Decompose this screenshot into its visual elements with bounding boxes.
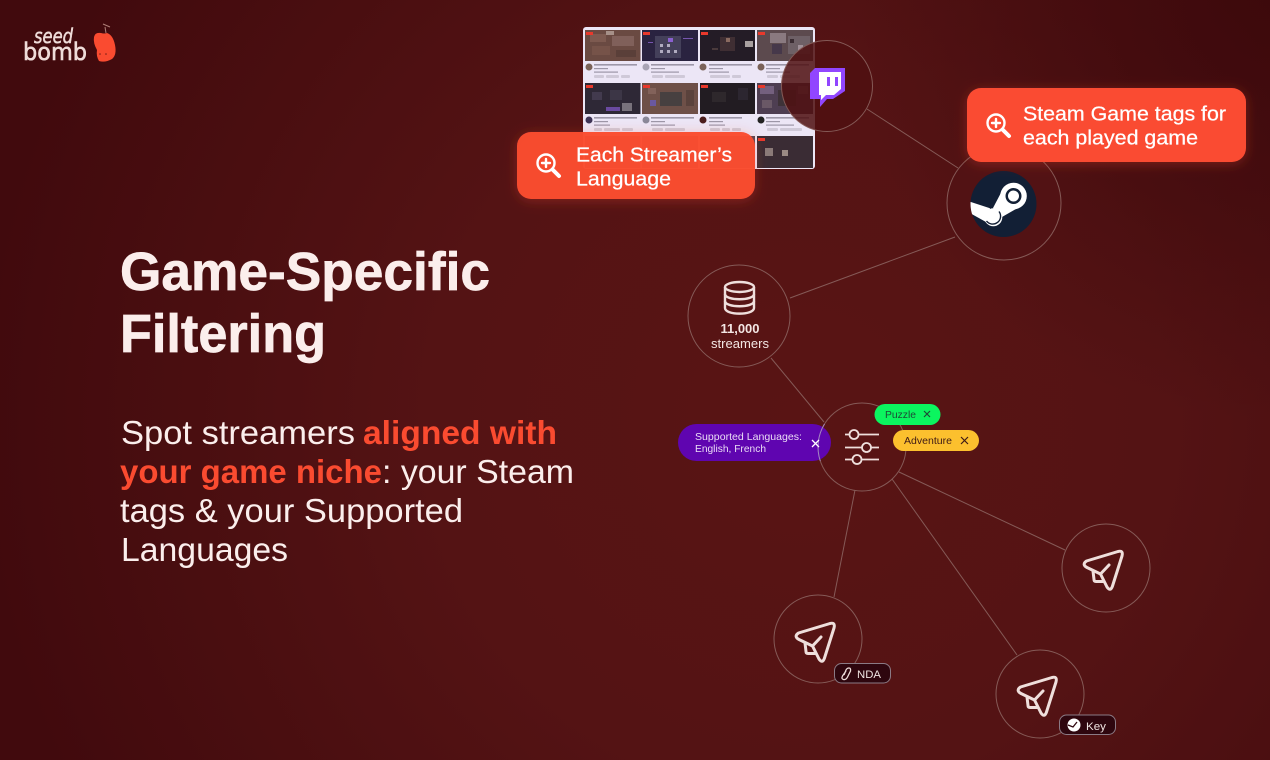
title: Game-Specific xyxy=(120,242,490,302)
callout: steam game tags xyxy=(967,88,1246,162)
tag: supported languages xyxy=(678,424,831,461)
body text: aligned with xyxy=(363,414,557,451)
tag: supported languages: English, French xyxy=(695,443,766,455)
callout: each streamer's language: Each Streamer’s xyxy=(576,144,732,166)
node: database 11,000 streamers: streamers xyxy=(711,336,769,351)
screenshot: streamer grid xyxy=(583,27,815,169)
live badges xyxy=(586,32,765,141)
tag: puzzle: Puzzle xyxy=(885,409,916,421)
node: send key xyxy=(996,650,1116,738)
node: filter xyxy=(818,403,906,491)
node: twitch xyxy=(782,40,872,132)
tag chips xyxy=(594,75,802,131)
logo: seed bomb: seed xyxy=(34,24,73,48)
callout: steam game tags: each played game xyxy=(1023,126,1198,150)
title xyxy=(120,242,490,364)
callout: each streamer's language: Language xyxy=(576,168,671,190)
icon: steam xyxy=(968,171,1036,237)
row 1 thumbnails xyxy=(585,30,813,61)
tag: adventure xyxy=(893,430,979,451)
node: send right xyxy=(1062,524,1150,612)
body text: tags & your Supported xyxy=(120,492,463,529)
avatars xyxy=(586,64,764,124)
icon: magnifier xyxy=(538,154,559,176)
metadata lines xyxy=(594,64,809,126)
tag: puzzle xyxy=(874,404,940,425)
logo: seed bomb xyxy=(23,24,116,66)
body text: Languages xyxy=(121,531,288,568)
body text: your game niche xyxy=(120,453,382,490)
tag: adventure: Adventure xyxy=(904,435,952,447)
badge: key: Key xyxy=(1086,721,1107,733)
body text: Spot streamers xyxy=(121,414,355,451)
node: database 11,000 streamers: 11,000 xyxy=(720,321,760,336)
icon: paper plane xyxy=(1018,677,1056,715)
node: database 11,000 streamers xyxy=(688,265,790,367)
icon: paper plane xyxy=(796,623,834,661)
row 3 thumbnails xyxy=(585,136,813,168)
row 2 thumbnails xyxy=(585,83,813,114)
tag: supported languages: Supported Languages: xyxy=(695,431,802,443)
icon: database xyxy=(725,282,754,314)
connector lines xyxy=(771,109,1065,655)
badge: NDA: NDA xyxy=(857,669,882,681)
logo: seed bomb: bomb xyxy=(23,38,87,66)
callout: each streamer's language xyxy=(517,132,755,199)
callout: steam game tags: Steam Game tags for xyxy=(1023,102,1226,126)
node: steam xyxy=(947,146,1061,260)
body text xyxy=(120,414,574,568)
icon: paper plane xyxy=(1084,551,1122,589)
body text: : your Steam xyxy=(382,453,574,490)
node: send NDA xyxy=(774,595,890,683)
icon: pepper xyxy=(94,24,116,62)
icon: sliders xyxy=(845,430,879,464)
title: Filtering xyxy=(120,304,326,364)
icon: magnifier xyxy=(988,114,1009,136)
icon: twitch xyxy=(810,68,845,107)
